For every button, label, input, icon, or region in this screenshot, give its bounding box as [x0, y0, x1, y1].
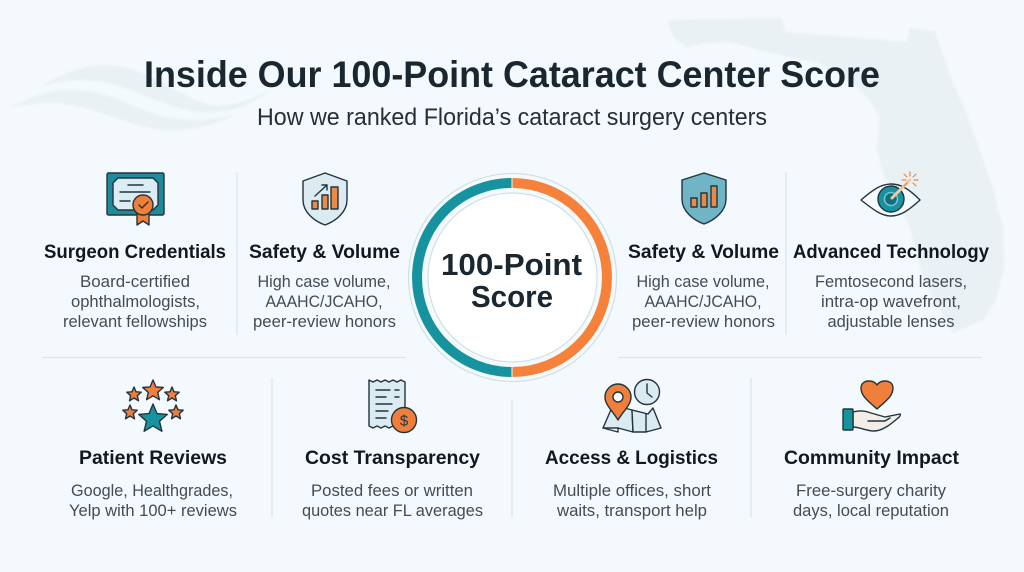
panel: surgeon credentials: Surgeon Credentials: [44, 241, 226, 263]
background: Florida silhouette: [668, 18, 1004, 333]
panel: surgeon credentials: ophthalmologists,: [71, 293, 200, 311]
icon: eye with laser: [861, 172, 920, 216]
panel: surgeon credentials: Board-certified: [80, 273, 190, 291]
background: waves: [10, 65, 270, 130]
panel: patient reviews: Google, Healthgrades,: [71, 482, 233, 500]
panel: advanced technology: Femtosecond lasers,: [815, 273, 967, 291]
icon: certificate: [107, 173, 164, 225]
panel: cost transparency: [302, 380, 483, 520]
panel: community impact: days, local reputation: [793, 502, 949, 520]
panel: community impact: [784, 381, 959, 520]
panel: safety and volume (left): High case volume,: [258, 273, 390, 291]
title: Inside Our 100-Point Cataract Center Score: [144, 54, 880, 95]
icon: receipt with dollar coin: $: [400, 412, 409, 430]
panel: surgeon credentials: relevant fellowships: [63, 313, 207, 331]
panel: safety and volume (left): [249, 173, 400, 331]
panel: safety and volume (right): High case volume,: [636, 273, 770, 291]
panel: access and logistics: Access & Logistics: [545, 447, 718, 469]
panel: community impact: Free-surgery charity: [796, 482, 947, 500]
panel: advanced technology: adjustable lenses: [828, 313, 954, 331]
subtitle: How we ranked Florida’s cataract surgery centers: [257, 104, 767, 131]
panel: advanced technology: [793, 172, 989, 331]
icon: stars: [123, 380, 183, 431]
panel: safety and volume (left): AAAHC/JCAHO,: [266, 293, 382, 311]
panel: advanced technology: Advanced Technology: [793, 241, 989, 263]
icon: shield with rising bars: [303, 173, 347, 225]
panel: access and logistics: Multiple offices, short: [553, 482, 711, 500]
panel: access and logistics: waits, transport help: [556, 502, 707, 520]
panel: patient reviews: Patient Reviews: [79, 447, 227, 469]
panel: advanced technology: intra-op wavefront,: [821, 293, 961, 311]
panel: community impact: Community Impact: [784, 447, 959, 469]
panel: cost transparency: quotes near FL averages: [302, 502, 483, 520]
center score ring: Score: [471, 279, 553, 314]
panel: safety and volume (right): peer-review honors: [632, 313, 775, 331]
icon: heart over open hand: [843, 381, 900, 431]
panel: access and logistics: [545, 380, 718, 520]
panel: safety and volume (right): AAAHC/JCAHO,: [644, 293, 762, 311]
center score ring: [408, 174, 616, 382]
icon: receipt with dollar coin: [369, 380, 416, 432]
icon: map, pin and clock: [603, 380, 661, 432]
panel: safety and volume (right): [628, 173, 779, 331]
panel: patient reviews: Yelp with 100+ reviews: [69, 502, 237, 520]
panel: safety and volume (left): Safety & Volume: [249, 241, 400, 263]
panel: patient reviews: [69, 380, 237, 520]
panel: cost transparency: Posted fees or written: [311, 482, 473, 500]
panel: surgeon credentials: [44, 173, 226, 331]
panel: safety and volume (left): peer-review honors: [253, 313, 396, 331]
panel: safety and volume (right): Safety & Volume: [628, 241, 779, 263]
icon: teal shield with bars: [682, 173, 726, 224]
panel: cost transparency: Cost Transparency: [305, 447, 480, 469]
score label: 100-Point: [441, 247, 582, 282]
